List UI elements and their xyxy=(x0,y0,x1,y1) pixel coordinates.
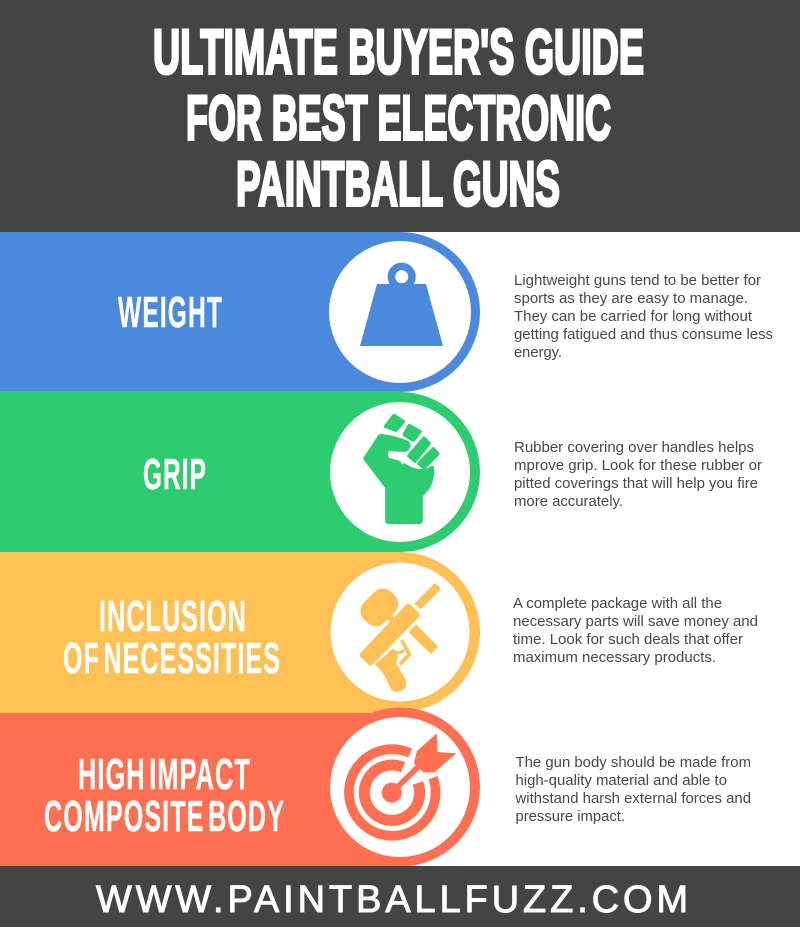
text: inclusion description xyxy=(513,596,758,666)
text: grip description xyxy=(514,440,762,510)
text: grip description: pitted coverings that will help you fire xyxy=(514,476,758,492)
heading: grip: GRIP xyxy=(143,450,207,499)
panel: weight xyxy=(0,232,773,392)
text: grip description: more accurately. xyxy=(514,494,623,510)
text: inclusion description: necessary parts will save money and xyxy=(513,614,758,630)
text: weight description: energy. xyxy=(514,345,562,361)
text: inclusion description: maximum necessary products. xyxy=(513,650,716,666)
title: PAINTBALL GUNS xyxy=(236,150,560,220)
text: weight description: sports as they are easy to manage. xyxy=(514,291,748,307)
panel: inclusion of necessities xyxy=(0,552,758,713)
header panel xyxy=(0,0,800,232)
panel: high impact composite body xyxy=(0,708,751,866)
text: inclusion description: A complete package with all the xyxy=(513,596,722,612)
text: grip description: Rubber covering over handles helps xyxy=(514,440,754,456)
heading: inclusion of necessities: INCLUSION xyxy=(99,592,247,641)
icon: target with arrow xyxy=(349,733,456,836)
footer panel xyxy=(0,866,800,927)
heading: high impact composite body: HIGH IMPACT xyxy=(78,750,251,799)
icon: fist xyxy=(365,416,438,522)
text: weight description: getting fatigued and thus consume less xyxy=(514,327,773,343)
heading: high impact composite body: COMPOSITE BODY xyxy=(44,792,285,841)
text: composite body description: pressure impact. xyxy=(516,809,625,825)
heading: inclusion of necessities: OF NECESSITIES xyxy=(63,634,281,683)
text: weight description: Lightweight guns tend to be better for xyxy=(514,273,761,289)
heading: high impact composite body xyxy=(44,750,285,841)
icon: paintball gun xyxy=(356,584,439,691)
text: composite body description: withstand harsh external forces and xyxy=(514,791,751,807)
heading: inclusion of necessities xyxy=(63,592,281,683)
text: inclusion description: time. Look for such deals that offer xyxy=(513,632,743,648)
text: weight description xyxy=(514,273,773,361)
text: composite body description: The gun body should be made from xyxy=(516,755,751,771)
heading: weight: WEIGHT xyxy=(118,288,223,337)
title xyxy=(153,18,644,220)
footer url: WWW.PAINTBALLFUZZ.COM xyxy=(96,879,692,921)
text: composite body description: high-quality material and able to xyxy=(516,773,727,789)
text: grip description: mprove grip. Look for these rubber or xyxy=(514,458,762,474)
icon: weight xyxy=(360,266,443,346)
text: weight description: They can be carried for long without xyxy=(514,309,752,325)
panel: grip xyxy=(0,391,762,552)
text: composite body description xyxy=(514,755,751,825)
